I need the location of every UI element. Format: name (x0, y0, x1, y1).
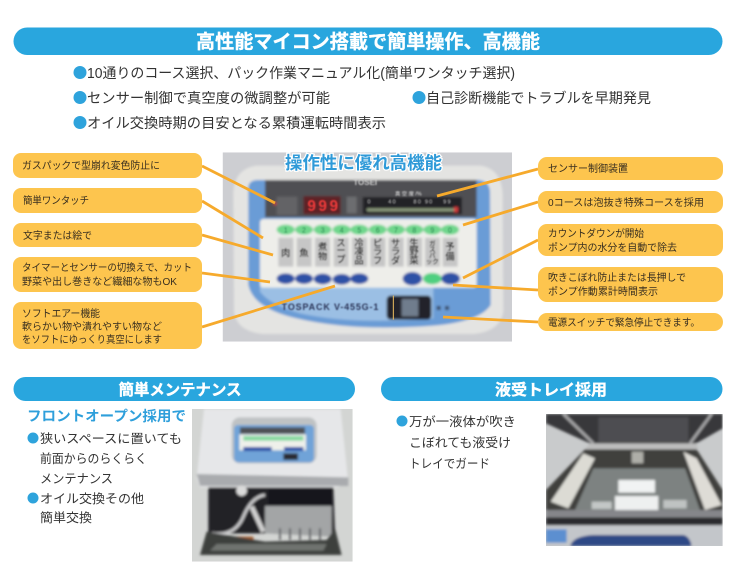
callout: timer and sensor: タイマーとセンサーの切換えで、カット (22, 262, 192, 274)
callout: one touch (13, 188, 202, 213)
drip tray bullet text: 万が一液体が吹き (409, 415, 516, 429)
panel labels: ス (337, 238, 346, 248)
panel labels: 0 (448, 227, 452, 234)
callout: spill prevention: ポンプ作動累計時間表示 (548, 285, 658, 298)
panel labels: フ (373, 255, 382, 265)
bullet: oil change timing: オイル交換時期の目安となる累積運転時間表示 (87, 115, 386, 132)
title banner (14, 28, 722, 55)
control panel photo (223, 152, 512, 342)
callout: countdown: ポンプ内の水分を自動で除去 (548, 241, 677, 254)
panel labels: 物 (318, 251, 327, 262)
heading banner: maintenance (14, 377, 355, 401)
drip tray bullet text: こぼれても液受け (409, 436, 511, 450)
panel labels: 予 (446, 242, 455, 252)
callout: spill prevention: 吹きこぼれ防止または長押しで (548, 271, 686, 284)
panel labels: TOSPACK V-455G-1 (282, 302, 378, 312)
feature bullet list (74, 65, 651, 132)
maintenance bullet one: 狭いスペースに置いても (40, 432, 182, 446)
callout: power switch: 電源スイッチで緊急停止できます。 (548, 316, 700, 329)
panel labels: 2 (302, 227, 306, 234)
panel labels: 冷 (355, 237, 364, 248)
panel labels: ピ (373, 238, 382, 248)
panel labels: 凍 (355, 246, 364, 257)
callout: sensor device: センサー制御装置 (548, 162, 628, 175)
panel labels: 野 (410, 247, 419, 257)
panel labels: 備 (446, 251, 455, 262)
callout: sensor device (538, 157, 723, 180)
panel labels: 0 40 80 90 99 (367, 200, 451, 206)
callout: countdown (538, 224, 723, 256)
photo: open front machine (192, 409, 353, 562)
panel labels: 999 (307, 198, 338, 215)
leader lines (202, 166, 538, 327)
subheading: front open: フロントオープン採用で (27, 408, 186, 425)
panel labels: ラ (373, 247, 382, 257)
callout: spill prevention (538, 267, 723, 302)
panel labels: ス (429, 246, 435, 254)
panel labels (281, 178, 455, 312)
drip tray bullet text (396, 415, 516, 471)
bullet: sensor control: センサー制御で真空度の微調整が可能 (87, 90, 330, 107)
panel labels: 1 (284, 227, 288, 234)
panel labels: 菜 (410, 254, 419, 265)
panel labels: 6 (376, 227, 380, 234)
maintenance bullet one (28, 432, 182, 486)
callout: one touch: 簡単ワンタッチ (23, 194, 89, 207)
callouts right (538, 157, 723, 331)
panel labels: パ (429, 252, 436, 260)
panel labels: ダ (391, 254, 400, 265)
panel heading: 操作性に優れ高機能 (285, 153, 442, 173)
callouts left (13, 153, 202, 349)
callout: course zero (538, 191, 723, 213)
callout: course zero: 0コースは泡抜き特殊コースを採用 (548, 196, 704, 209)
callout: soft air: 軟らかい物や潰れやすい物など (22, 320, 163, 333)
callout: timer and sensor: 野菜や出し巻きなど繊細な物もOK (22, 275, 177, 288)
callout: gas pack (13, 153, 202, 178)
panel labels: サ (391, 238, 400, 248)
title banner: 高性能マイコン搭載で簡単操作、高機能 (196, 30, 540, 53)
callout: soft air (13, 302, 202, 349)
maintenance bullet two: 簡単交換 (40, 510, 92, 525)
callout: gas pack: ガスパックで型崩れ変色防止に (22, 159, 160, 172)
callout: countdown: カウントダウンが開始 (548, 227, 645, 240)
callout: soft air: ソフトエアー機能 (22, 307, 101, 320)
panel labels: ラ (391, 247, 400, 257)
panel labels: プ (337, 255, 346, 265)
bullet: course selection: 10通りのコース選択、パック作業マニュアル化(簡単ワンタッチ選択) (87, 65, 515, 82)
panel labels: 4 (340, 227, 344, 234)
panel labels: 魚 (300, 247, 309, 258)
drip tray bullet text: トレイでガード (409, 457, 490, 471)
panel labels: 8 (412, 227, 416, 234)
maintenance bullet one: メンテナンス (40, 472, 113, 486)
photo: drip tray (546, 414, 723, 546)
panel labels: ガ (429, 239, 435, 248)
panel labels: 品 (355, 255, 364, 265)
section: easy maintenance (14, 377, 355, 562)
callout: text or picture: 文字または絵で (23, 229, 92, 242)
heading banner: maintenance: 簡単メンテナンス (118, 380, 242, 399)
panel labels: 肉 (281, 247, 290, 258)
panel labels: 煮 (318, 242, 327, 252)
panel labels: 7 (394, 227, 398, 234)
section: drip tray (381, 377, 723, 546)
heading banner: drip tray: 液受トレイ採用 (495, 380, 607, 399)
panel labels: 9 (430, 227, 434, 234)
callout: soft air: をソフトにゆっくり真空にします (22, 333, 162, 346)
panel labels: 生 (410, 237, 419, 248)
bullet: self diagnosis: 自己診断機能でトラブルを早期発見 (426, 89, 651, 107)
maintenance bullet two (28, 492, 144, 525)
panel labels: TOSEI (353, 178, 377, 187)
callout: timer and sensor (13, 257, 202, 292)
heading banner: drip tray (381, 377, 722, 401)
callout: power switch (538, 313, 723, 331)
callout: text or picture (13, 223, 202, 247)
panel labels: 3 (321, 227, 325, 234)
maintenance bullet two: オイル交換その他 (40, 492, 144, 506)
panel labels: ー (337, 246, 346, 256)
maintenance bullet one: 前面からのらくらく (40, 451, 147, 466)
panel labels: 5 (357, 227, 361, 234)
panel labels: ック (426, 258, 439, 266)
panel labels: 真 空 度 /% (395, 190, 422, 198)
